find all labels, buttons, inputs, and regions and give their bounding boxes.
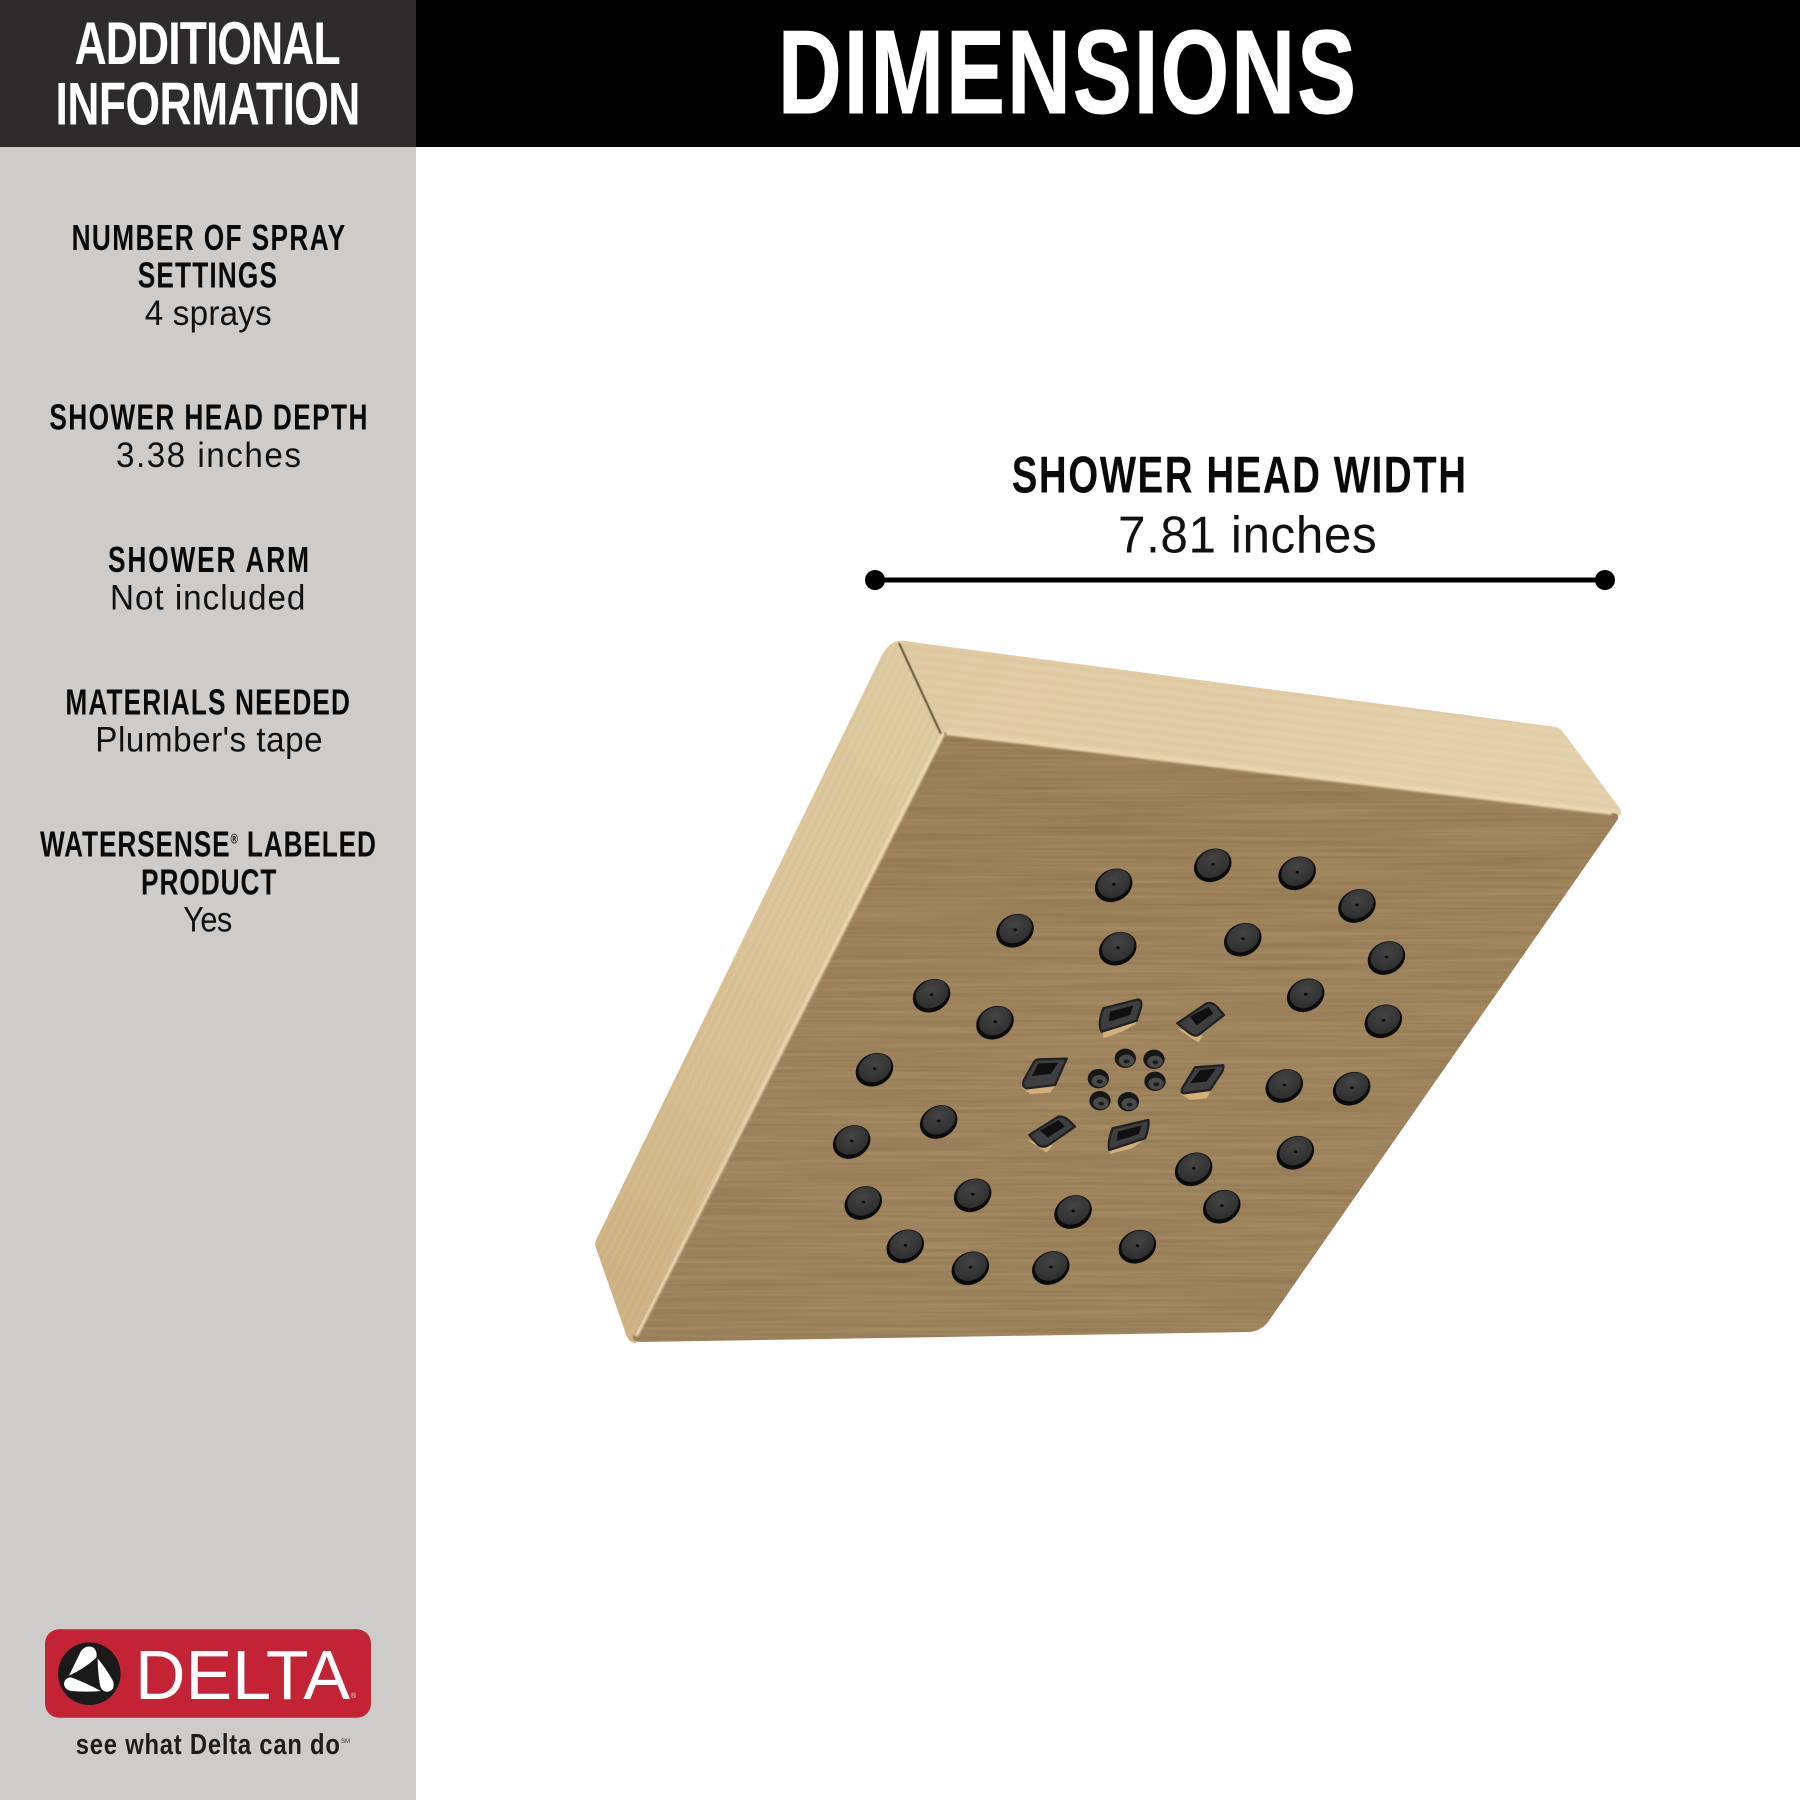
spec: watersense labeled product: WATERSENSE	[40, 823, 230, 865]
spec: materials needed	[65, 681, 350, 760]
spec: shower head depth: SHOWER HEAD DEPTH	[49, 396, 367, 438]
title: dimensions	[416, 0, 1800, 147]
spec: shower arm	[108, 539, 309, 618]
spec: watersense labeled product	[40, 823, 376, 939]
spec: materials needed: MATERIALS NEEDED	[65, 681, 350, 722]
header: additional information	[0, 0, 416, 147]
top side face	[897, 641, 1621, 816]
logo: delta: ®	[351, 1692, 357, 1700]
spray nozzles: six rectangular jets	[1023, 999, 1224, 1154]
panel: sidebar background	[0, 147, 416, 1800]
logo: delta	[45, 1629, 371, 1718]
dimension label: shower head width: SHOWER HEAD WIDTH	[1012, 446, 1466, 504]
arrow: width dimension line	[865, 570, 1615, 590]
spec: shower arm: Not included	[110, 579, 305, 618]
spec: watersense labeled product: Yes	[183, 900, 232, 939]
header: additional information: INFORMATION	[56, 71, 360, 138]
spec: number of spray settings	[72, 217, 345, 333]
shower head	[595, 641, 1621, 1343]
edge highlights	[636, 733, 1612, 1336]
spray nozzles: center cluster	[1088, 1049, 1166, 1111]
spec: number of spray settings: 4 sprays	[145, 294, 272, 333]
logo: delta: DELTA	[135, 1636, 350, 1714]
spec: shower arm: SHOWER ARM	[108, 539, 309, 580]
icon: delta tri-drop emblem	[58, 1642, 121, 1705]
spec: shower head depth	[49, 396, 367, 475]
tagline: see what delta can do: see what Delta can do	[76, 1728, 340, 1761]
spec: shower head depth: 3.38 inches	[116, 436, 301, 475]
left side face	[595, 641, 945, 1343]
spec: watersense labeled product: PRODUCT	[141, 861, 277, 902]
title: dimensions: DIMENSIONS	[778, 6, 1356, 139]
spec: number of spray settings: SETTINGS	[138, 254, 277, 296]
spray nozzles: outer and middle rings	[827, 842, 1411, 1292]
front spray face	[633, 732, 1618, 1342]
tagline: see what delta can do: SM	[341, 1739, 350, 1745]
corner seam	[899, 643, 941, 734]
spec: number of spray settings: NUMBER OF SPRAY	[72, 217, 345, 258]
spec: materials needed: Plumber's tape	[95, 721, 323, 760]
spec: watersense labeled product: LABELED	[239, 823, 376, 865]
dimension label: shower head width	[1012, 446, 1466, 564]
header: additional information: ADDITIONAL	[75, 11, 341, 78]
spec: watersense labeled product: ®	[230, 831, 238, 847]
dimension label: shower head width: 7.81 inches	[1118, 506, 1377, 564]
